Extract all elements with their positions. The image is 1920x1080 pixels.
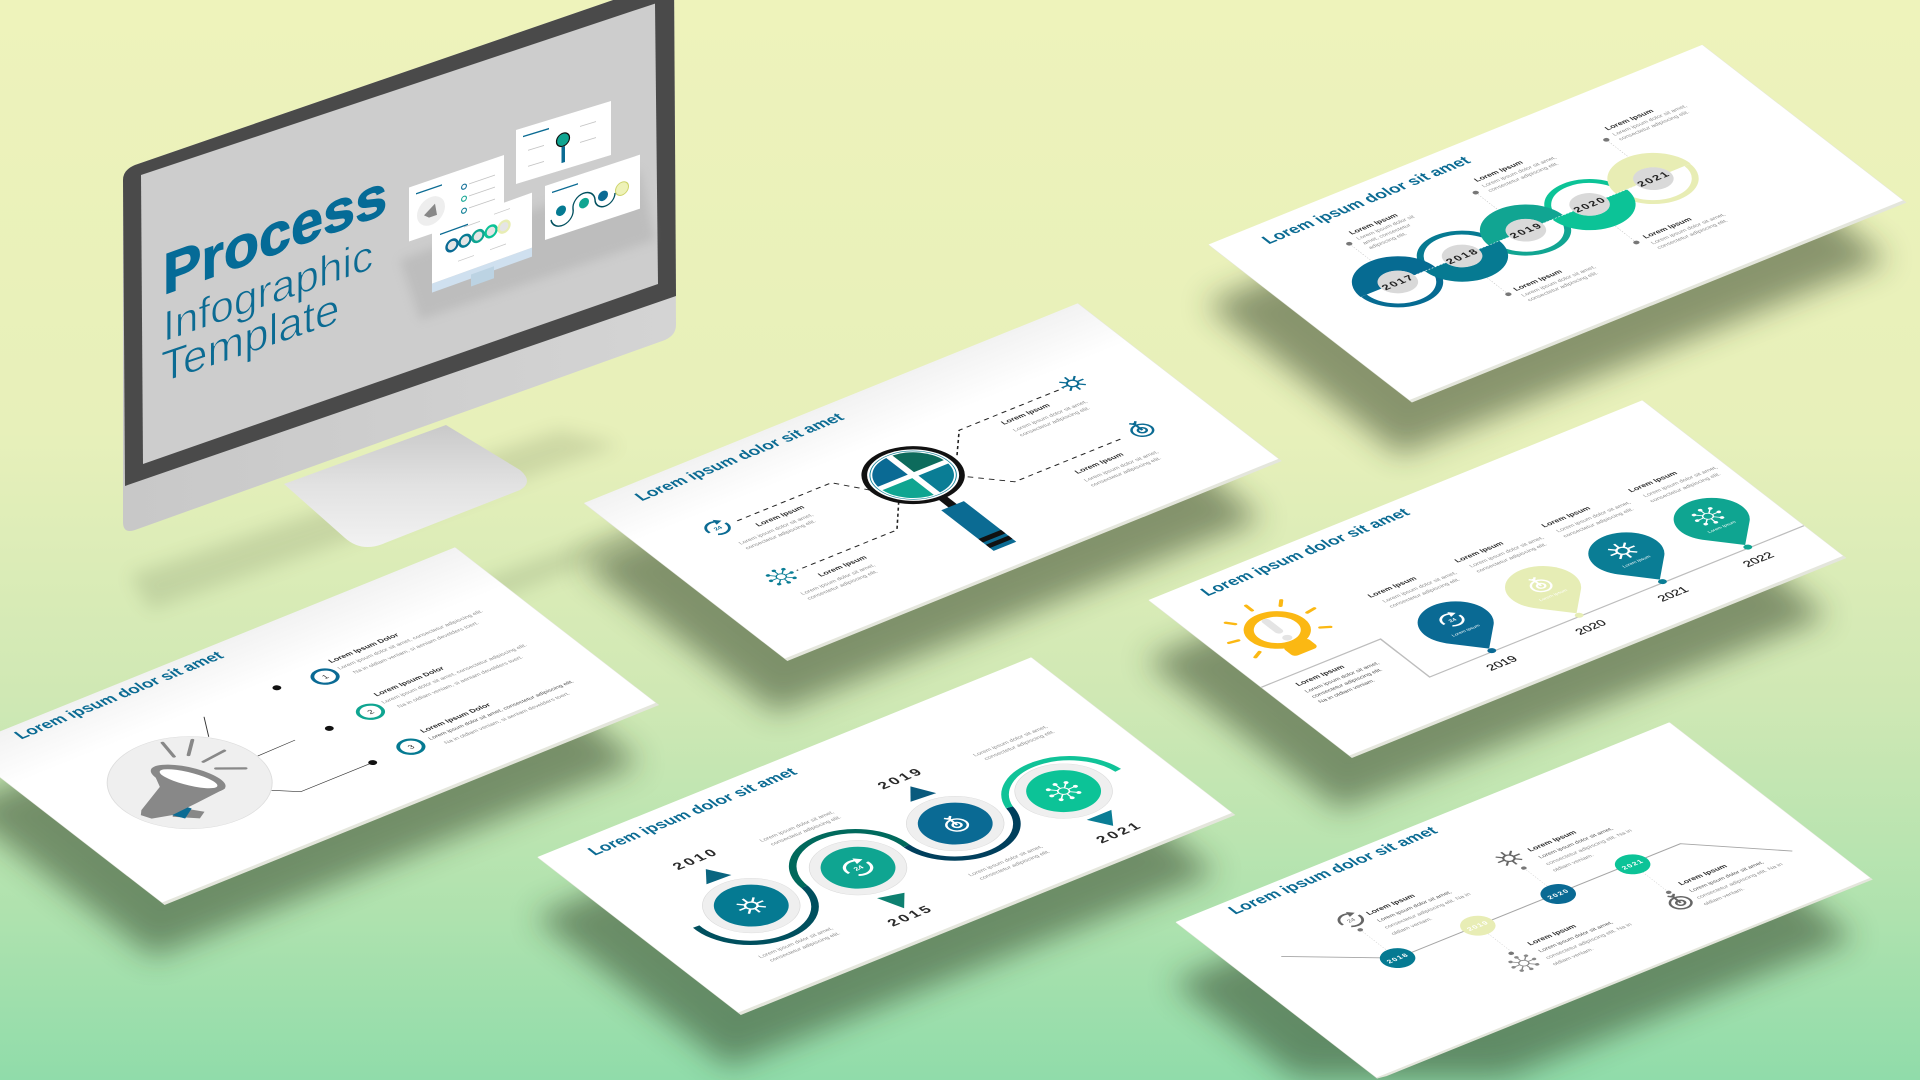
slide edge	[584, 303, 1282, 661]
year discs: 2018	[1443, 247, 1482, 266]
icon: cycle 24: 24	[1346, 917, 1358, 924]
callout text blocks: Lorem ipsum dolor sit amet,	[1642, 466, 1720, 498]
pin 2019: 24	[1448, 617, 1459, 624]
slide: chain timeline	[1208, 45, 1906, 403]
callout text blocks	[722, 389, 1167, 602]
dotted stems	[1360, 835, 1669, 987]
slide: megaphone	[0, 547, 659, 905]
year labels: 2021	[1654, 585, 1692, 604]
callout text blocks: Lorem Ipsum	[1072, 451, 1126, 475]
description text blocks: Lorem ipsum dolor sit amet,	[759, 810, 836, 843]
year labels: 2019	[1483, 654, 1521, 673]
title: Lorem ipsum dolor sit amet	[1197, 506, 1414, 599]
list text blocks: Na in oldiam veniam, si aeniam develders toert.	[443, 692, 572, 745]
callout text blocks: Lorem ipsum dolor sit amet,	[1555, 501, 1633, 534]
callout text blocks: amet, consectetur	[1362, 223, 1413, 246]
step 2019	[853, 759, 1023, 862]
callout text blocks: consectetur adipiscing elit.	[1090, 456, 1164, 488]
center dotted line	[1398, 179, 1653, 282]
connector lines	[1349, 140, 1704, 319]
year nodes: 2018	[1384, 952, 1411, 965]
description text blocks: consectetur adipiscing elit.	[769, 931, 843, 963]
megaphone disc	[75, 718, 305, 847]
pin 2022: Lorem Ipsum	[1707, 520, 1737, 534]
callout text blocks: Lorem Ipsum	[1511, 268, 1565, 292]
list text blocks: Lorem Ipsum Dolor	[372, 665, 446, 698]
callout text blocks: Lorem Ipsum	[753, 504, 807, 528]
slide surface	[1209, 45, 1903, 400]
callout text blocks: Lorem ipsum dolor sit amet,	[1382, 571, 1459, 604]
slide edge	[537, 657, 1235, 1015]
year nodes: 2021	[1619, 858, 1646, 871]
pin 2020	[1490, 558, 1613, 630]
numbered badges: 1	[320, 673, 331, 680]
slide: wave timeline	[537, 657, 1235, 1015]
title: Lorem ipsum dolor sit amet	[10, 649, 228, 742]
monitor	[123, 0, 676, 547]
list text blocks	[326, 601, 585, 748]
callout text blocks: Lorem ipsum dolor sit amet,	[738, 513, 816, 546]
callout text blocks: Lorem Ipsum	[1293, 663, 1347, 687]
callout text blocks: Lorem Ipsum	[816, 554, 869, 578]
list text blocks: Lorem Ipsum Dolor	[326, 632, 401, 664]
title: Lorem ipsum dolor sit amet	[1224, 824, 1442, 917]
list text blocks: Lorem ipsum dolor sit amet, consectetur adipiscing elit.	[337, 609, 485, 671]
slide surface	[0, 547, 656, 903]
description text blocks: Lorem ipsum dolor sit amet,	[758, 926, 835, 959]
callout text blocks: Lorem Ipsum	[1641, 216, 1694, 240]
callout text blocks: consectetur adipiscing elit. Na in	[1384, 892, 1473, 930]
step 2021	[995, 753, 1164, 854]
callout text blocks: Lorem Ipsum	[1347, 212, 1400, 236]
callout text blocks: Lorem ipsum dolor sit amet,	[1538, 827, 1615, 860]
callout text blocks: consectetur adipiscing elit.	[806, 570, 880, 601]
year labels: 2020	[1572, 618, 1610, 637]
callout text blocks: consectetur adipiscing elit. Na in	[1545, 829, 1634, 866]
numbered badges	[304, 667, 432, 757]
callout text blocks: Lorem ipsum dolor sit amet,	[1650, 213, 1728, 246]
step 2019: 2019	[874, 766, 928, 792]
callout text blocks: consectetur adipiscing elit.	[1527, 271, 1601, 303]
pin 2019: Lorem Ipsum	[1451, 624, 1481, 637]
slide: magnifier	[584, 303, 1282, 661]
callout text blocks: consectetur adipiscing elit.	[1388, 578, 1462, 609]
callout text blocks	[1333, 96, 1801, 332]
stem dots	[1356, 833, 1673, 989]
monitor screen	[141, 4, 658, 464]
callout text blocks: Lorem Ipsum	[1452, 540, 1506, 564]
step 2021: 2021	[1093, 820, 1147, 846]
year discs: 2021	[1635, 170, 1674, 189]
callout text blocks: Lorem ipsum dolor sit amet,	[1612, 104, 1689, 137]
timeline line	[1281, 785, 1792, 1023]
callout text blocks: Lorem ipsum dolor sit amet,	[1538, 921, 1615, 954]
pin 2021	[1573, 524, 1696, 596]
slide surface	[1149, 400, 1843, 756]
callout text blocks: Lorem ipsum dolor sit	[1356, 215, 1417, 241]
callout text blocks: consectetur adipiscing elit.	[1487, 162, 1561, 193]
list text blocks: Lorem Ipsum Dolor	[418, 701, 493, 734]
list text blocks: Na in oldiam veniam, si aeniam develders toert.	[396, 655, 525, 709]
magnifier lens	[845, 437, 981, 513]
year discs	[1369, 163, 1682, 298]
callout text blocks: consectetur adipiscing elit. Na in	[1696, 863, 1785, 900]
callout text blocks: Lorem ipsum dolor sit amet,	[1304, 661, 1382, 694]
mini slide: magnifier	[516, 101, 611, 184]
numbered badges: 3	[406, 743, 417, 750]
step 2010: 2010	[670, 846, 723, 872]
icon: virus	[1504, 952, 1544, 974]
year nodes	[1373, 850, 1657, 973]
callout text blocks	[1243, 457, 1783, 704]
step 2010	[648, 840, 819, 944]
callout text blocks: consectetur adipiscing elit.	[744, 519, 818, 551]
step 2015	[790, 829, 963, 934]
callout text blocks: consectetur adipiscing elit. Na in	[1545, 923, 1634, 960]
icon: light bulb	[1203, 588, 1349, 669]
list text blocks: Na in oldiam veniam, si aeniam develders toert.	[352, 621, 481, 675]
screen subheading: Infographic: Infographic	[163, 231, 373, 352]
mini slides shadow	[400, 170, 655, 320]
dashed connectors	[733, 388, 1127, 570]
description text blocks: Lorem ipsum dolor sit amet,	[968, 845, 1045, 878]
year discs: 2019	[1507, 221, 1546, 240]
title: Lorem ipsum dolor sit amet	[1258, 154, 1475, 247]
slide edge	[1176, 722, 1873, 1079]
connector lines	[186, 689, 371, 799]
slide surface	[538, 657, 1232, 1013]
year labels	[1483, 550, 1777, 673]
mini monitor	[432, 193, 532, 301]
description text blocks: consectetur adipiscing elit.	[770, 815, 844, 847]
callout text blocks: consectetur adipiscing elit.	[1649, 472, 1723, 504]
callout text blocks: consectetur adipiscing elit.	[1019, 406, 1092, 438]
magnifier handle	[931, 493, 1016, 551]
list text blocks: Lorem ipsum dolor sit amet, consectetur adipiscing elit.	[381, 643, 529, 705]
callout text blocks: Lorem ipsum dolor sit amet,	[1689, 860, 1766, 893]
description text blocks	[660, 724, 1157, 967]
callout text blocks: Lorem ipsum dolor sit amet,	[1521, 265, 1598, 298]
icon: virus	[761, 566, 801, 588]
callout text blocks: Lorem ipsum dolor sit amet,	[800, 563, 877, 596]
year discs: 2020	[1571, 196, 1610, 214]
callout text blocks: Lorem ipsum dolor sit amet,	[1376, 890, 1454, 923]
icon: gear	[1054, 373, 1091, 394]
callout text blocks: Lorem ipsum dolor sit amet,	[1481, 156, 1559, 189]
slide: line timeline	[1175, 722, 1873, 1079]
step 2015: 24	[851, 864, 866, 872]
mini slide: wave timeline	[545, 155, 640, 240]
callout text blocks: consectetur adipiscing elit.	[1618, 110, 1692, 142]
description text blocks: consectetur adipiscing elit.	[978, 850, 1052, 881]
pin 2020: Lorem Ipsum	[1538, 588, 1569, 602]
callout text blocks: consectetur adipiscing elit.	[1475, 542, 1549, 574]
monitor cast shadow	[130, 430, 660, 670]
callout text blocks	[1363, 784, 1793, 1000]
description text blocks: Lorem ipsum dolor sit amet,	[972, 725, 1050, 758]
slide surface	[1176, 722, 1870, 1078]
callout text blocks: Lorem Ipsum	[1539, 505, 1593, 529]
callout text blocks: consectetur adipiscing elit.	[1562, 507, 1636, 539]
callout text blocks: Lorem Ipsum	[1472, 159, 1525, 183]
callout text blocks: consectetur adipiscing elit.	[1311, 668, 1385, 699]
list text blocks: Lorem ipsum dolor sit amet, consectetur adipiscing elit.	[428, 680, 576, 741]
callout text blocks: Lorem ipsum dolor sit amet,	[1083, 450, 1161, 483]
icon: target	[1124, 419, 1157, 439]
numbered badges: 2	[365, 708, 377, 716]
callout text blocks: Lorem ipsum dolor sit amet,	[1469, 536, 1546, 569]
callout text blocks: consectetur adipiscing elit.	[1656, 219, 1730, 250]
year labels: 2022	[1740, 550, 1777, 569]
icon: cycle 24	[699, 517, 734, 537]
description text blocks: consectetur adipiscing elit.	[983, 730, 1057, 761]
pin 2021: Lorem Ipsum	[1621, 555, 1652, 568]
callout text blocks: oldiam veniam.	[1702, 887, 1747, 907]
bullet dots	[270, 684, 379, 766]
title: Lorem ipsum dolor sit amet	[584, 765, 801, 858]
chain rings	[1339, 146, 1712, 315]
year nodes: 2019	[1465, 919, 1491, 932]
icon: cycle 24: 24	[712, 525, 725, 532]
callout text blocks: Lorem Ipsum	[1676, 863, 1730, 887]
monitor bezel	[123, 0, 676, 486]
callout text blocks: Lorem Ipsum	[1626, 470, 1680, 494]
slide edge	[1208, 45, 1906, 403]
monitor body and chin	[123, 0, 676, 531]
callout text blocks: Lorem Ipsum	[1603, 108, 1656, 132]
callout text blocks: Lorem Ipsum	[999, 402, 1052, 426]
slide edge	[0, 547, 659, 905]
icon: target	[1662, 891, 1696, 911]
slide edge	[1148, 400, 1846, 758]
year nodes: 2020	[1545, 887, 1572, 901]
callout text blocks: oldiam veniam.	[1390, 917, 1435, 936]
frame line	[1261, 488, 1804, 725]
mini slide: megaphone	[409, 155, 504, 242]
monitor stand	[284, 425, 527, 547]
icon: gear	[1490, 848, 1528, 869]
callout text blocks: Na in oldiam veniam.	[1317, 679, 1377, 704]
callout text blocks: Lorem Ipsum	[1365, 575, 1419, 599]
icon: cycle 24	[1333, 910, 1367, 929]
callout text blocks: adipiscing elit.	[1368, 232, 1409, 250]
step 2015: 2015	[884, 903, 938, 929]
callout text blocks: Lorem Ipsum	[1364, 892, 1417, 916]
callout text blocks: Lorem Ipsum	[1525, 829, 1579, 853]
screen heading: Process: Process	[163, 161, 387, 308]
callout text blocks: oldiam veniam.	[1552, 853, 1596, 873]
pin 2019	[1403, 593, 1525, 665]
callout text blocks: Lorem ipsum dolor sit amet,	[1012, 400, 1090, 433]
callout text blocks: Lorem Ipsum	[1525, 923, 1579, 947]
wave path	[663, 735, 1146, 957]
slide: location pins	[1148, 400, 1846, 758]
pin 2022	[1659, 489, 1781, 562]
year discs: 2017	[1379, 273, 1418, 292]
icon: megaphone	[87, 729, 273, 833]
screen subheading: Template: Template	[161, 282, 340, 393]
callout text blocks: oldiam veniam.	[1552, 947, 1596, 967]
slide surface	[584, 303, 1278, 659]
title: Lorem ipsum dolor sit amet	[631, 410, 848, 503]
